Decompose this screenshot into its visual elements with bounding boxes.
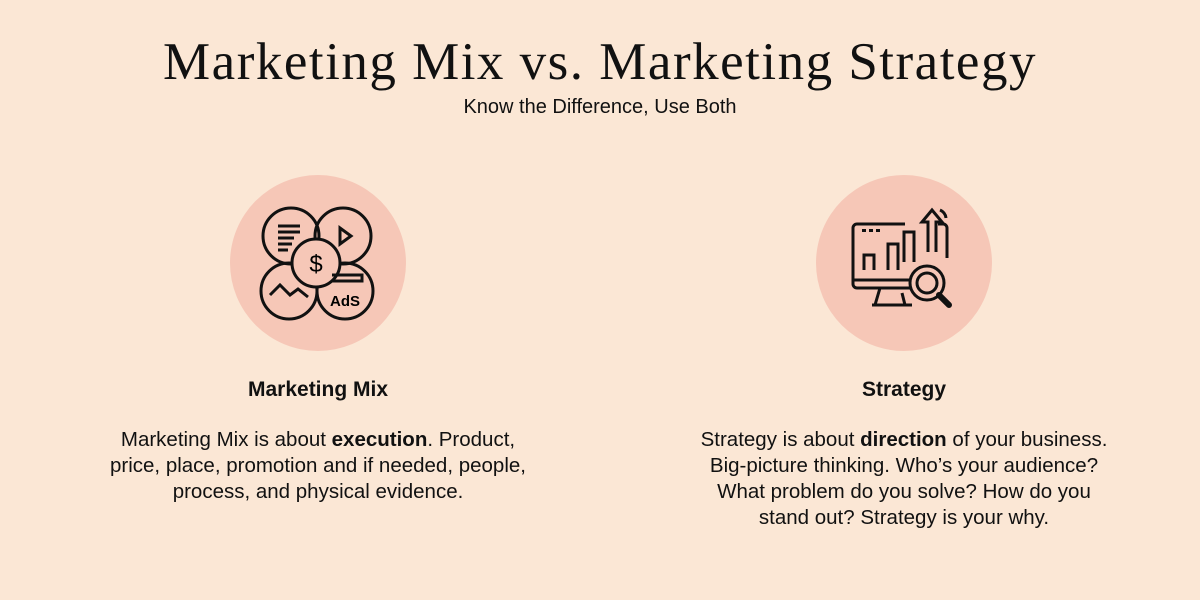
icon: marketing mix: AdS bbox=[330, 293, 360, 310]
icon: marketing mix: $ bbox=[309, 251, 323, 278]
text: marketing mix: process, and physical evidence. bbox=[173, 480, 463, 503]
title: Marketing Mix vs. Marketing Strategy bbox=[163, 33, 1037, 91]
subtitle: Know the Difference, Use Both bbox=[463, 96, 737, 118]
heading: strategy: Strategy bbox=[862, 378, 946, 401]
text: marketing mix: Marketing Mix is about execution. Product, bbox=[121, 428, 515, 451]
text: strategy: Big-picture thinking. Who’s your audience? bbox=[710, 454, 1098, 477]
text: strategy bbox=[701, 428, 1107, 529]
text: strategy: What problem do you solve? How do you bbox=[717, 480, 1091, 503]
text: marketing mix: price, place, promotion and if needed, people, bbox=[110, 454, 526, 477]
text: strategy: stand out? Strategy is your why. bbox=[759, 506, 1049, 529]
text: marketing mix bbox=[110, 428, 526, 503]
text: strategy: Strategy is about direction of your business. bbox=[701, 428, 1107, 451]
heading: marketing mix: Marketing Mix bbox=[248, 378, 388, 401]
icon: strategy bbox=[816, 175, 992, 351]
icon: marketing mix bbox=[230, 175, 406, 351]
